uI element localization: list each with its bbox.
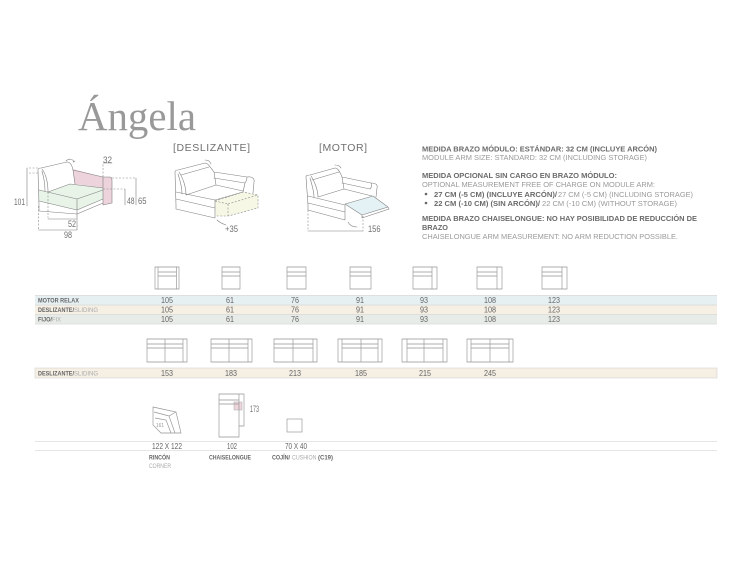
row: deslizante: SLIDING	[74, 307, 98, 314]
diagram: module dimensions: 32	[103, 155, 112, 165]
table: sofa widths: 183	[225, 368, 237, 378]
text block: arm measurements: 22 CM (-10 CM) (SIN ARCÓN)/	[434, 199, 541, 208]
table: sofa widths: 245	[484, 368, 496, 378]
diagram: module dimensions: 101	[14, 197, 25, 207]
row: fijo: 105	[161, 314, 173, 324]
row: motor relax: 76	[291, 295, 299, 305]
row: deslizante: 76	[291, 304, 299, 314]
row: fijo: FIX	[52, 316, 62, 324]
seat highlight	[39, 184, 103, 210]
diagram: module dimensions: 52	[68, 219, 76, 229]
diagram: motor footrest	[306, 165, 389, 234]
row: deslizante: 93	[420, 304, 428, 314]
label: cushion: CUSHION	[292, 454, 317, 462]
row: fijo: 108	[484, 314, 496, 324]
table: module widths	[35, 295, 717, 324]
label: cushion: COJÍN/	[272, 452, 290, 462]
row: deslizante	[35, 304, 717, 314]
diagram: module dimensions: 98	[64, 230, 72, 240]
footrest	[345, 196, 388, 215]
diagram: module dimensions	[14, 155, 146, 240]
row: motor relax: 61	[226, 295, 234, 305]
icon: corner plan: 161	[156, 423, 164, 429]
row: motor relax: 93	[420, 295, 428, 305]
label: chaiselongue: CHAISELONGUE	[209, 454, 251, 462]
table: extras: 122 X 122	[152, 441, 182, 451]
diagram: sliding seat: +35	[225, 224, 238, 234]
table: extras	[35, 441, 717, 451]
row: fijo: 76	[291, 314, 299, 324]
heading: deslizante: [DESLIZANTE]	[173, 142, 250, 154]
table: sofa widths: 153	[161, 368, 173, 378]
table: extras: 70 X 40	[285, 441, 307, 451]
row: deslizante: 123	[548, 304, 560, 314]
row: deslizante: 108	[484, 304, 496, 314]
heading: motor: [MOTOR]	[319, 142, 367, 154]
title: Ángela	[78, 93, 196, 139]
icon: chaiselongue plan: 173	[250, 404, 259, 414]
text block: arm measurements: 27 CM (-5 CM) (INCLUDING STORAGE)	[558, 190, 693, 199]
text block: arm measurements: MEDIDA BRAZO CHAISELONGUE: NO HAY POSIBILIDAD DE REDUCCIÓN DE	[422, 214, 697, 223]
label: corner: CORNER	[149, 463, 171, 470]
icon: chaiselongue plan	[219, 394, 259, 437]
table: sofa widths	[35, 368, 717, 378]
table: sofa widths: 213	[289, 368, 301, 378]
row: fijo: 93	[420, 314, 428, 324]
row: fijo: 61	[226, 314, 234, 324]
module plan icons row	[155, 267, 567, 289]
table: sofa widths: DESLIZANTE/	[38, 370, 74, 378]
text block: arm measurements: 27 CM (-5 CM) (INCLUYE ARCÓN)/	[434, 190, 558, 199]
row: deslizante: 91	[356, 304, 364, 314]
row: motor relax: 91	[356, 295, 364, 305]
label: cushion	[272, 452, 333, 462]
text block: arm measurements: CHAISELONGUE ARM MEASUREMENT: NO ARM REDUCTION POSSIBLE.	[422, 232, 678, 241]
label: corner: RINCÓN	[149, 452, 170, 462]
row: fijo	[35, 314, 717, 324]
row: deslizante: DESLIZANTE/	[38, 307, 74, 314]
row: motor relax	[35, 295, 717, 305]
text block: arm measurements: MEDIDA OPCIONAL SIN CARGO EN BRAZO MÓDULO:	[422, 171, 617, 180]
row: fijo: FIJO/	[38, 316, 52, 324]
row: deslizante: 105	[161, 304, 173, 314]
row: fijo: 123	[548, 314, 560, 324]
text block: arm measurements: MODULE ARM SIZE: STANDARD: 32 CM (INCLUDING STORAGE)	[422, 153, 647, 162]
text block: arm measurements: MEDIDA BRAZO MÓDULO: ESTÁNDAR: 32 CM (INCLUYE ARCÓN)	[422, 144, 657, 154]
table: sofa widths: 185	[355, 368, 367, 378]
text block: arm measurements: 22 CM (-10 CM) (WITHOUT STORAGE)	[542, 199, 677, 208]
diagram: module dimensions: 48	[127, 196, 134, 206]
sofa plan icons row	[147, 339, 513, 362]
table: sofa widths: 215	[419, 368, 431, 378]
sliding extension	[215, 192, 258, 216]
diagram: sliding seat	[175, 160, 258, 234]
row: motor relax: 105	[161, 295, 173, 305]
icon: corner plan	[153, 407, 181, 433]
text block: arm measurements: OPTIONAL MEASUREMENT FREE OF CHARGE ON MODULE ARM:	[422, 180, 655, 189]
row: motor relax: MOTOR RELAX	[38, 298, 79, 304]
diagram: motor footrest: 156	[368, 224, 380, 234]
label: cushion: (C19)	[318, 454, 333, 462]
arm highlight	[73, 169, 112, 205]
label: corner	[149, 452, 171, 470]
table: extras: 102	[227, 441, 237, 451]
row: motor relax: 108	[484, 295, 496, 305]
row: motor relax: 123	[548, 295, 560, 305]
text block: arm measurements: BRAZO	[422, 223, 448, 232]
text block: arm measurements	[422, 144, 697, 241]
row: fijo: 91	[356, 314, 364, 324]
row: deslizante: 61	[226, 304, 234, 314]
pink marker	[234, 402, 242, 410]
diagram: module dimensions: 65	[138, 196, 146, 206]
table: sofa widths: SLIDING	[74, 370, 98, 378]
icon: cushion plan	[287, 419, 302, 432]
